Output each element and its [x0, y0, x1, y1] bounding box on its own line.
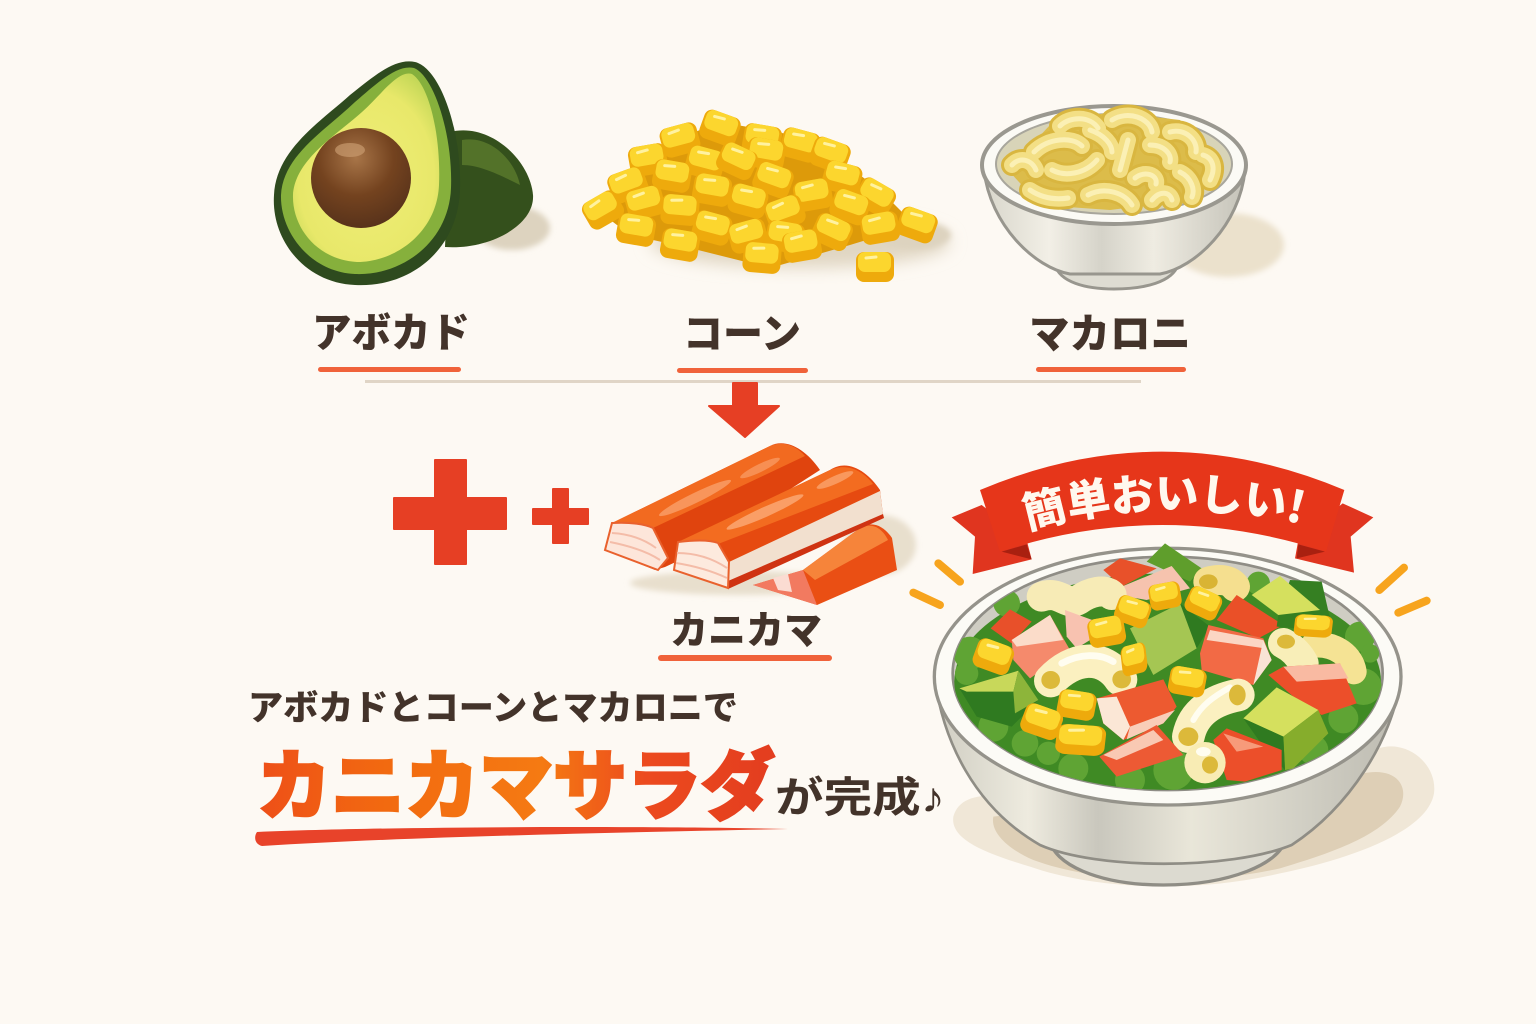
label: avocado: アボカド [312, 310, 470, 356]
avocado big dark side [1153, 603, 1210, 675]
text: completed: が完成♪ [775, 774, 945, 821]
crab back [1103, 558, 1157, 587]
avocado back [1147, 543, 1202, 582]
macaroni small [1184, 742, 1226, 783]
title: crab salad: カニカマサラダ [257, 745, 775, 830]
crab big right [1200, 625, 1272, 685]
crab right lower [1268, 663, 1357, 715]
avocado top right [1252, 576, 1330, 628]
salad contents [953, 572, 1382, 795]
bowl inner [953, 557, 1383, 790]
sparkle lines [913, 563, 1427, 613]
icon: avocado [274, 61, 550, 285]
infographic canvas [252, 61, 1434, 887]
underline: crab stick [658, 655, 832, 661]
table shadow [953, 746, 1434, 886]
crab center [1097, 679, 1177, 740]
underline: macaroni [1036, 367, 1186, 372]
label: corn: コーン [683, 311, 801, 357]
icon: large plus [394, 460, 506, 564]
bowl foot [1050, 840, 1285, 885]
bowl rim [934, 548, 1401, 805]
ribbon: 簡単おいしい! [1021, 475, 1304, 532]
icon: small plus [533, 489, 588, 543]
crab right top [1217, 595, 1283, 638]
text: sentence line: アボカドとコーンとマカロニで [248, 689, 738, 728]
macaroni center [1041, 656, 1131, 689]
avocado big [1130, 603, 1197, 675]
arrow: down [709, 383, 779, 437]
crab pink [1065, 610, 1097, 648]
macaroni lower [1178, 685, 1246, 746]
ribbon [952, 452, 1374, 574]
underline: corn [677, 368, 808, 373]
macaroni top right [1199, 574, 1235, 589]
avocado right [1243, 687, 1328, 770]
icon: crab sticks [605, 443, 916, 605]
crab left small [991, 609, 1032, 643]
avocado left [959, 671, 1038, 727]
illustration: salad bowl with ribbon [909, 452, 1434, 887]
underline: avocado [318, 367, 461, 372]
crab bottom right [1213, 728, 1282, 782]
macaroni wavy [1042, 591, 1112, 602]
icon: corn pile [579, 107, 951, 282]
crab bottom [1099, 725, 1183, 777]
label: macaroni: マカロニ [1029, 311, 1191, 357]
label: crab stick: カニカマ [670, 610, 822, 653]
bowl body [935, 680, 1401, 864]
underline: title swoosh [255, 827, 788, 846]
macaroni right [1277, 635, 1303, 663]
icon: macaroni bowl [982, 106, 1284, 289]
crab stripes left [1012, 615, 1070, 678]
corn kernels [970, 580, 1334, 757]
macaroni far right [1313, 645, 1354, 672]
